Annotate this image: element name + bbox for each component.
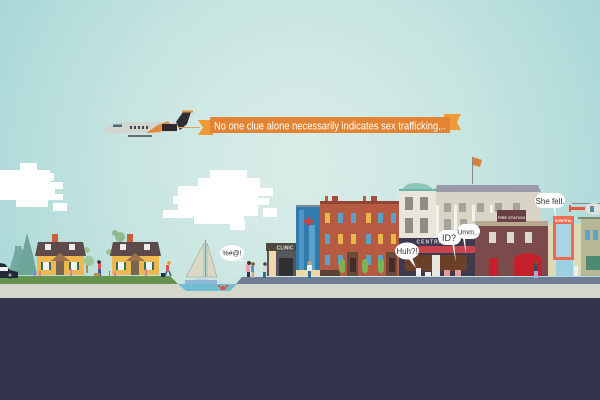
airplane [102,110,193,137]
house 2 [109,234,161,276]
glass tower [296,205,320,276]
speech bubble: Umm...: Umm... [457,230,480,236]
banner text: No one clue alone necessarily indicates sex trafficking... [214,120,446,132]
helicopter [569,203,600,215]
water [178,284,237,291]
flag [472,157,482,184]
speech bubble: Huh?!: Huh?! [396,247,418,256]
tree: behind house 1 [84,247,94,273]
woman in front of fire station [534,261,538,278]
pavement [236,277,600,284]
sailboat [185,240,217,284]
hospital [553,216,578,276]
cloud: middle [163,170,277,230]
grass [0,276,178,284]
icon: red cross [304,217,313,226]
sky background [0,0,600,300]
person with dog [94,260,101,276]
couple [246,261,255,278]
fire station: FIRE STATION [498,215,525,220]
house 1 [34,234,86,276]
police car [0,263,18,278]
speech bubble: Umm... [457,224,480,254]
fire station [475,210,548,276]
person: runner [307,261,312,278]
building: beige left of hospital [548,224,581,276]
speech bubble: ID?: ID? [442,233,456,243]
person: at clinic [263,262,267,278]
speech bubble: She fell [535,193,565,219]
clinic: CLINIC [277,246,294,252]
sidewalk [0,284,600,298]
ground: dark band [0,298,600,400]
speech bubble: Huh?! [395,242,419,268]
clinic [266,243,297,276]
speech bubble: swearing: %#@! [222,250,242,258]
crab [218,285,228,290]
trees: pines [8,233,37,275]
banner [198,114,461,135]
person with suitcase [161,261,171,277]
cafe: central: CENTRAL [417,240,447,246]
hospital: HOSPITAL [555,219,573,223]
cloud: left [0,163,67,211]
cafe: central [399,238,477,276]
speech bubble: swearing [220,245,244,262]
tow line [178,127,200,128]
speech bubble: She fell: She fell. [536,197,564,206]
grand building [399,183,541,252]
speech bubble: ID? [438,230,461,262]
tree: behind house 2 [106,230,125,255]
building: right [578,217,600,276]
brick rowhouses [320,196,400,276]
